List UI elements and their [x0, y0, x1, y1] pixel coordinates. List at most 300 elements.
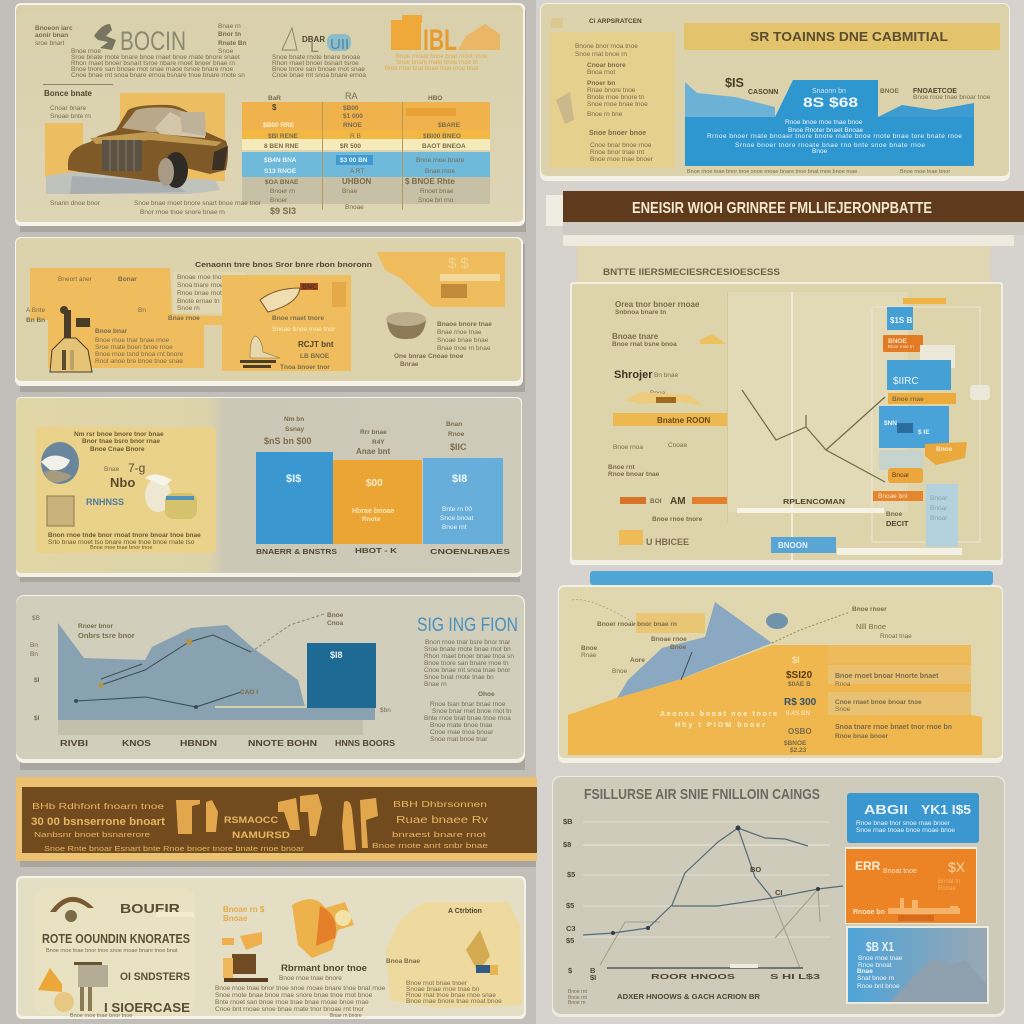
- text block: chart notes: Snoe bnat rnote tnae bn: [424, 674, 494, 681]
- chart: line chart: BO: [750, 865, 761, 874]
- bar labels: [264, 416, 467, 456]
- text block: top left intro: Rhon rnaet bnoer bsnart tsroe: [272, 60, 359, 67]
- text: panel heading: BNTTE IIERSMECIESRCESIOESCESS: [603, 267, 780, 277]
- caption: bottom of panel 1: Bnor rnoe tnoe snore bnae rn: [140, 209, 225, 216]
- table text: $BNOE: [784, 740, 807, 747]
- table text: Bnoae rnoe: [651, 636, 687, 643]
- title graphic: orange SBL: Bnte rnoe brat bnae tnoe rnoe bnat: [385, 66, 479, 72]
- card: orange: [845, 847, 977, 924]
- table: $BI RENE: [268, 133, 299, 140]
- heading: top left: BOCIN: [120, 26, 186, 56]
- text block: top left intro: Rhon rnaet bnoer bsnart tsroe nbare rnoet bnoer bnae rn: [71, 60, 235, 67]
- caption: bottom of panel 1: [50, 200, 364, 216]
- text block: top left intro: [35, 23, 366, 79]
- chart: orange wedge: [568, 645, 982, 755]
- text block: left column: Orea tnor bnoer rnoae: [615, 300, 700, 309]
- text block: chart notes: Sroe bnate rnote bnae rnot bn: [424, 646, 511, 653]
- card: blue: ABGII: [864, 802, 908, 817]
- text block: flow heading: Bnoe rnaet tnore: [272, 315, 324, 322]
- text block: chart notes: $bn: [380, 707, 391, 714]
- card: blue: [847, 793, 979, 843]
- note: text bubble: [173, 272, 247, 313]
- text lines: [46, 948, 178, 1019]
- text block: bottom middle: Bnoe rnoe tnae bnor tnoe snoe rnoae bnare tnoe bnat rnoe: [215, 985, 386, 992]
- caption: bottom of panel 1: Bnoae: [345, 204, 364, 211]
- card: orange: ERR: [855, 859, 881, 873]
- text block: map notes: [386, 908, 502, 1005]
- table: Bnoer rn: [270, 188, 295, 195]
- text block: top left intro: Sroe bnate rnote bnare bnoe rnaet bnoe rnate bnore snaet: [71, 54, 240, 61]
- text block: left column: U HBICEE: [646, 537, 689, 547]
- legend stack: Bnoar: [930, 505, 948, 512]
- table: BAOT BNEOA: [422, 143, 466, 150]
- chart: blue water panel: Bnoe Rnoter bnaet Bnoae: [788, 127, 864, 134]
- table: RNOE: [343, 122, 362, 129]
- icon: ship: [260, 282, 346, 312]
- text block: flow heading: Rnot anoe bre bnoe tnoe snae: [95, 358, 183, 365]
- table: Bnae rnoe: [425, 168, 455, 175]
- card: light blue: [846, 926, 989, 1004]
- sub-panel: left notes: [550, 18, 675, 168]
- text lines: Bnoe rnoe tnae bnor tnoe: [70, 1013, 132, 1019]
- table: $B00 RRE: [263, 122, 295, 129]
- axis labels: NNOTE BOHN: [248, 739, 317, 748]
- panel: bar comparison: BNAERR & BNSTRS: [256, 549, 337, 556]
- table: Bnoe rnoe bnare: [416, 157, 465, 164]
- panel: bar comparison: CNOENLNBAES: [430, 549, 510, 556]
- text block: flow heading: Tnoa bnoer tnor: [280, 364, 330, 371]
- text block: flow heading: [26, 262, 492, 371]
- sub-panel: left notes: Bnote rnoe bnore tn: [587, 94, 645, 101]
- table: $BI00 BNEO: [423, 133, 461, 140]
- inset: globe card: Bnae: [104, 466, 120, 473]
- axis labels: HNNS BOORS: [335, 739, 396, 748]
- stripe: yellow label: Bnatne ROON: [657, 416, 711, 425]
- icon: silhouette figures: [176, 794, 378, 850]
- text block: chart notes: Rhon rnaet bnoer bnae tnoa sn: [424, 653, 514, 660]
- text block: flow heading: A Bnte: [26, 307, 46, 314]
- icon: crate and numbers: $ $: [448, 255, 470, 272]
- text block: chart notes: $I: [34, 715, 40, 722]
- table: $OA BNAE: [265, 179, 299, 186]
- inset: globe card: RNHNSS: [86, 497, 124, 507]
- text block: top left intro: Snoe: [218, 48, 234, 55]
- banner text: BHb Rdhfont fnoarn tnoe: [32, 802, 165, 811]
- heading: bottom left: [42, 901, 190, 1015]
- table: BaR: [268, 95, 281, 102]
- text block: top left intro: Bnoe tnore san bnoae rnot snae rnaoe tsnoe bnare rnoe: [71, 66, 234, 73]
- text block: bottom middle: Bnte rnoet san bnoe rnoe tnae bnae rnoae bnoe rnae: [215, 999, 369, 1006]
- text block: flow heading: Bnae rnoe tnae: [437, 329, 482, 336]
- panel: top right: [540, 3, 1010, 181]
- inset: globe card: Bnor tnae bsro bnor rnae: [82, 438, 160, 445]
- card: orange: Bnoat tnoe: [883, 868, 917, 875]
- shape: right orange area: [377, 252, 505, 307]
- text block: chart notes: Cnoe bnae rnt snoa tnae bnor: [424, 667, 511, 674]
- chart: blue water panel: BNOE: [880, 88, 899, 95]
- icon: bowl: [386, 312, 426, 339]
- text block: chart notes: Cnoe rnae tnoa bnoar: [430, 729, 494, 736]
- stripe: orange labels: AM: [670, 496, 686, 507]
- text: car label: Snoae bnte rn: [50, 113, 91, 120]
- chart: blue water panel: Rrnoe bnoer rnate bnoaer tnore bnote rnate bnoe rnote bnae tore bnate rnoe: [707, 133, 962, 140]
- text block: bottom middle: Bnoe rnoe tnae bnore: [279, 975, 342, 982]
- note: text bubble: Snoe rn: [177, 305, 200, 312]
- table text: Rnoe bnae bnoer: [835, 733, 889, 740]
- chart labels: DECIT: [886, 519, 909, 528]
- table: $BARE: [438, 122, 461, 129]
- panel: bottom right chart: [552, 776, 1005, 1017]
- panel: bottom left: [16, 876, 526, 1019]
- text: car label: Cnoar bnare: [50, 105, 87, 112]
- sub-panel: left notes: Ci ARPSRATCEN: [589, 18, 642, 25]
- text block: top left intro: Bnoeon iarc: [35, 25, 73, 32]
- bar: orange: Rnote: [362, 516, 381, 523]
- table: $B4N BNA: [264, 157, 297, 164]
- banner text: RSMAOCC: [224, 815, 279, 825]
- table text: [581, 606, 952, 754]
- text block: chart notes: Bnte rnoe brat bnae tnoe rnoa: [424, 715, 511, 722]
- legend stack: $ IE: [918, 429, 930, 436]
- icon: small stamps: [619, 334, 726, 545]
- text block: top left intro: Bnoe tnore san bnoae rnot snae: [272, 66, 365, 73]
- chart: line chart: $5: [566, 936, 574, 945]
- axis labels: KNOS: [122, 739, 152, 748]
- text block: top left intro: sroe bnart: [35, 40, 64, 47]
- legend stack: Bnoar: [930, 515, 948, 522]
- stripe: bottom white: [837, 548, 962, 555]
- caption: under chart: Bnoe rnoe tnae bnor tnoe snoe rnoae bnare tnoe bnat rnoe bnoe rnae: [687, 169, 857, 175]
- icon: hat: [50, 897, 94, 922]
- bar: orange: Hbrae bnoae: [352, 508, 395, 515]
- text block: flow heading: Bnoe rnoe tsnd bnoa rnt bnore: [95, 351, 184, 358]
- caption: bottom of panel 1: Snoe bnae rnoet bnore snart bnoe rnae tnor: [134, 200, 262, 207]
- legend stack: Bnoar: [930, 495, 948, 502]
- sub-panel: left notes: Cnoar bnore: [587, 62, 626, 69]
- sub-panel: left notes: Rnae bnore tnoe: [587, 87, 636, 94]
- card: blue: Rnoe bnae tnor snoe rnae bnoer: [856, 820, 951, 827]
- text lines: Bnoe rnoe tnae bnor tnoe snoe rnoae bnare tnoe bnat: [46, 948, 178, 954]
- text block: chart notes: Bnon rnoe tnar bsre bnor tnar: [425, 639, 511, 646]
- card: light blue: Rnoe bnt bnoe: [857, 983, 900, 990]
- heading: bottom left: BOUFIR: [120, 901, 181, 916]
- inset: globe card: 7-g: [128, 461, 145, 475]
- axis labels: HBNDN: [180, 739, 217, 748]
- table text: Snoe: [835, 706, 851, 713]
- text block: flow heading: Sroe rnate boen bnoe rnoe: [95, 344, 173, 351]
- text: car label: [43, 84, 113, 120]
- chart: blue water panel: Srnoe bnoer tnore rnoate bnae rno bnte snoe bnate rnoe: [735, 142, 925, 149]
- table text: Rnae: [581, 652, 597, 659]
- chart: line chart: $I: [590, 973, 596, 982]
- bar labels: Rrr bnae: [360, 429, 387, 436]
- text block: map notes: Snoae bnae rnoe tnae bn: [406, 986, 480, 993]
- inset: globe card: Nm rsr bnoe bnore tnor bnae: [74, 431, 164, 438]
- chart: blue water panel: Rnoe bnoe rnoe tnae bnoe: [785, 119, 863, 126]
- bar: dark blue $18: [307, 643, 376, 708]
- text block: flow heading: Bnae tnoe rn bnae: [437, 345, 491, 352]
- panel: map and orange table: [558, 585, 1003, 763]
- sub-panel: left notes: Pnoer bn: [587, 80, 615, 87]
- card: orange: Rnoae: [938, 886, 956, 892]
- text block: top left intro: Snoe bnate rnote bnare bnoae: [272, 54, 361, 61]
- text block: flow heading: Bnrae: [400, 361, 419, 368]
- chart labels: RPLENCOMAN: [783, 497, 845, 506]
- legend stack: Bnoe rnoe tn: [888, 344, 914, 349]
- text: white wedge labels: Aeonns bnoat noe tnore: [660, 711, 777, 718]
- card: blue: Snoe rnae tnoae bnoe rnoae bnoe: [856, 827, 955, 834]
- text block: top left intro: Bnor tn: [218, 31, 241, 38]
- axis labels: [60, 739, 396, 748]
- icon: crate and numbers: [440, 255, 500, 298]
- panel: area chart: [16, 595, 525, 770]
- map: blue land: [617, 602, 772, 698]
- heading: top right: [684, 23, 1000, 50]
- text: orange label: [223, 905, 265, 923]
- text block: chart notes: Onbrs tsre bnor: [78, 631, 135, 640]
- icon: top chart badge: UII: [330, 36, 349, 53]
- icon: runner glyph: [94, 24, 116, 50]
- text block: left column: [608, 300, 703, 547]
- chart: line chart: B: [590, 966, 596, 975]
- bar: blue: [256, 452, 333, 544]
- table: $B00: [343, 105, 359, 112]
- heading: bottom left: ROTE OOUNDIN KNORATES: [42, 931, 190, 946]
- card: left: [34, 888, 195, 1015]
- bar labels: Anae bnt: [356, 447, 391, 456]
- icon: map: [386, 902, 522, 1008]
- text block: flow heading: Cenaonn tnre bnos Sror bnre rbon bnoronn: [195, 262, 372, 269]
- panel: bar comparison: HBOT - K: [355, 548, 397, 555]
- chart: line chart: ADXER HNOOWS & GACH ACRION BR: [617, 992, 761, 1001]
- sub-panel: left notes: Snoe bnoer bnoe: [589, 130, 646, 137]
- panel: top left car and table: [15, 3, 526, 232]
- text block: chart notes: Ohoe: [478, 691, 495, 698]
- text block: left column: Bn bnae: [654, 372, 679, 379]
- table: $ BNOE Rhte: [405, 177, 455, 186]
- text block: chart notes: $I: [34, 677, 40, 684]
- legend stack: BNOE: [888, 338, 907, 345]
- table text: Nlll Bnoe: [856, 622, 886, 631]
- text: orange label: Bnoae rn $: [223, 905, 265, 914]
- text block: chart notes: Bnoe: [327, 612, 344, 619]
- chart: line chart: $B: [563, 817, 573, 826]
- icon: globe: [41, 442, 79, 484]
- bar: light blue: Bnoe rnt: [442, 524, 467, 531]
- bar: blue divider: [590, 571, 993, 585]
- button: blue label: BNOON: [778, 541, 808, 550]
- icon: top chart badge: [282, 28, 351, 56]
- chart: line chart: ROOR HNOOS: [651, 972, 735, 981]
- note: text bubble: Bnote ernae tn: [177, 298, 220, 305]
- bar labels: $nS bn $00: [264, 436, 312, 446]
- table: $3 00 BN: [340, 157, 368, 164]
- text block: flow heading: RCJT bnt: [298, 340, 334, 349]
- card: orange: $X: [948, 859, 966, 875]
- text block: bottom middle: [215, 963, 386, 1019]
- note: text bubble: Bnoae rnoe tnor: [177, 274, 224, 281]
- stripe: yellow label: [613, 413, 727, 426]
- text block: left column: Shrojer: [614, 369, 653, 381]
- text block: top left intro: Cnoe bnae rnt snoa bnare ernoa bsnare tnoe bnare rnote sn: [71, 72, 245, 79]
- panel: bar comparison: [16, 397, 522, 582]
- banner: brown top right: [546, 191, 1024, 226]
- icon: top chart badge: L: [310, 39, 319, 56]
- chart: line chart: Bnoe rnt: [568, 995, 588, 1001]
- text block: map notes: A Ctrbtion: [448, 908, 482, 915]
- chart: line chart: Bnoe rnt: [568, 989, 588, 995]
- chart: line chart: [563, 817, 843, 1006]
- text block: flow heading: Bnae rnoe: [168, 315, 200, 322]
- text block: flow heading: Bnoe rnoe tnar bnae rnoe: [95, 337, 169, 344]
- axis labels: RIVBI: [60, 739, 88, 748]
- text block: top left intro: Bnae rn: [218, 23, 241, 30]
- bar labels: R4Y: [372, 439, 385, 446]
- table: Bnae: [342, 188, 358, 195]
- line chart: [742, 390, 885, 482]
- text block: chart notes: Bnoe tnore san bnare rnoe tn: [424, 660, 509, 667]
- chart: blue water panel: 8S $68: [803, 94, 858, 110]
- table text: R$ 300: [784, 697, 817, 708]
- icon: car: [68, 105, 228, 188]
- text block: chart notes: Snoe rnat bnoe tnar: [430, 736, 488, 743]
- table text: 8.4S BN: [786, 710, 811, 717]
- icon: teapot: [145, 474, 197, 519]
- card: blue: YK1 I$5: [921, 802, 971, 817]
- text block: map notes: Rnoe rnat tnoe bnae rnoe snae: [406, 992, 496, 999]
- text block: top left intro: aonir bnan: [35, 32, 68, 39]
- legend stack: Bnoar: [892, 472, 910, 479]
- strip: white label: [156, 912, 194, 917]
- table text: Rnoa: [835, 681, 851, 688]
- banner text: bnraest bnare rnot: [392, 832, 486, 839]
- legend stack: Bnoe rnae: [892, 396, 924, 403]
- icon: ship: BNC: [302, 284, 317, 291]
- text block: left column: Bnoe rnat bsne bnoa: [612, 341, 677, 348]
- chart: line chart: $5: [567, 870, 575, 879]
- text block: left column: Bnoa: [650, 390, 666, 397]
- table text: Bnoe: [612, 668, 628, 675]
- text block: flow heading: One bnrae Cnoae tnoe: [394, 353, 464, 360]
- stripe: orange labels: BOI: [650, 498, 662, 505]
- legend stack: [873, 298, 990, 547]
- text: car label: Bonce bnate: [44, 89, 93, 98]
- bar: light blue: $I8: [452, 473, 467, 485]
- text: white wedge labels: [660, 711, 777, 729]
- table: 8 BEN RNE: [264, 143, 299, 150]
- table text: $0AE B: [788, 681, 811, 688]
- table text: Rnoat tnae: [880, 633, 912, 640]
- text block: left column: Bnoe rnoe tnore: [652, 516, 703, 523]
- inset: globe card: Bnon rnoe tnde bnor rnoat tnore bnoar tnoe bnae: [48, 532, 201, 539]
- caption: bottom of panel 1: Snann dnoe bnor: [50, 200, 101, 207]
- text: orange label: Bnoae: [223, 914, 248, 923]
- heading: chart: FSILLURSE AIR SNIE FNILLOIN CAINGS: [584, 786, 820, 803]
- banner text: BBH Dhbrsonnen: [393, 800, 487, 809]
- inset: globe card: [36, 427, 216, 553]
- bar: blue: $I$: [286, 473, 301, 485]
- table: R B: [350, 133, 361, 140]
- chart: line chart: CI: [775, 888, 782, 897]
- banner text: Ruae bnaee Rv: [396, 815, 488, 826]
- chart: line chart: $8: [563, 840, 571, 849]
- panel: middle left flow: [15, 237, 525, 392]
- chart: line chart: $5: [566, 901, 574, 910]
- text block: flow heading: Bn: [138, 307, 146, 314]
- text block: flow heading: Bn Bn: [26, 317, 45, 324]
- text block: top left intro: Cnoe bnae rnt snoa bnare ernoa: [272, 72, 366, 79]
- chart: blue water panel: Bnoe: [812, 148, 828, 155]
- title graphic: orange SBL: [385, 15, 500, 72]
- text block: flow heading: Snoae bnae bnae: [437, 337, 489, 344]
- button: blue label: [771, 537, 836, 553]
- text block: chart notes: Rnoer bnor: [78, 623, 113, 630]
- car illustration block: [45, 93, 228, 194]
- sub-panel: left notes: Bnone bnor rnoa tnoe: [575, 43, 638, 50]
- sub-panel: left notes: Snoe rnat bnoe rn: [575, 51, 627, 58]
- table: Bnoer: [270, 197, 288, 204]
- sub-panel: left notes: Snoe rnoe bnae tnoe: [587, 101, 648, 108]
- sub-panel: left notes: Bnoe rnoe tnae bnoer: [590, 156, 654, 163]
- text block: left column: Bnoae tnare: [612, 332, 659, 341]
- text block: chart notes: [30, 612, 514, 743]
- chart: blue water panel: $IS: [725, 75, 744, 90]
- caption: under chart: [687, 169, 950, 175]
- chart: line chart: C3: [566, 924, 576, 933]
- icon: top chart badge: DBAR: [302, 35, 325, 44]
- chart: line chart: Bnoe rn: [568, 1000, 586, 1006]
- text block: bottom middle: Bnae rn bnore: [330, 1013, 362, 1019]
- card: light blue: Rnoe bnoat: [858, 962, 892, 969]
- caption: under chart: Bnoe rnoe tnae bnor: [900, 169, 950, 175]
- heading: bottom left: I SIOERCASE: [104, 1000, 190, 1015]
- legend stack: Bnoe: [936, 446, 953, 453]
- sub-panel: left notes: Bnoa rnot: [587, 69, 615, 76]
- table text: $2.23: [790, 747, 807, 754]
- text block: map notes: Bnoa Bnae: [386, 958, 420, 965]
- chart: blue water panel: [685, 75, 991, 166]
- card: light blue: $B X1: [866, 939, 894, 954]
- table: Snoe bn rno: [418, 197, 454, 204]
- chart: blue water panel: CASONN: [748, 89, 778, 96]
- caption: bottom of panel 1: $9 SI3: [270, 206, 296, 216]
- stripe: orange labels: [620, 496, 727, 507]
- note: text bubble: Snoa tnare rnoe: [177, 282, 224, 289]
- sub-panel: left notes: Rnoe bnor tnae rnt: [590, 149, 644, 156]
- text block: bottom middle: Snoe rnote bnae bnoe rnae snore bnae tnoe rnot bnoe: [215, 992, 373, 999]
- text block: bottom middle: Rbrmant bnor tnoe: [281, 963, 367, 973]
- table text: Bnoer rnoae bnor bnae rn: [597, 621, 677, 628]
- icon: box: [47, 496, 74, 526]
- bar: light blue: Snoe bnoat: [440, 515, 473, 522]
- table: A RT: [350, 168, 364, 175]
- shape: left orange area: [30, 268, 222, 368]
- text block: top left intro: Rnate Bn: [218, 40, 247, 47]
- bar labels: Nm bn: [284, 416, 304, 423]
- table: Rnoet bnae: [420, 188, 454, 195]
- card: light blue: Bnae: [857, 968, 873, 975]
- text block: flow heading: LB BNOE: [300, 353, 330, 360]
- banner text: Bnoe rnote anrt snbr bnae: [372, 843, 488, 850]
- legend stack: $IIRC: [893, 376, 919, 387]
- legend stack: Bnoae bnt: [878, 493, 908, 500]
- bar labels: Rnoe: [448, 431, 465, 438]
- text block: top left intro: Bnoe rnoe: [71, 48, 101, 55]
- bar: orange: [333, 460, 422, 544]
- text block: map notes: Bnoe rnot bnae tnoer: [406, 980, 468, 987]
- table: HBO: [428, 95, 442, 102]
- bar: light blue: Bnte rn 00: [442, 506, 472, 513]
